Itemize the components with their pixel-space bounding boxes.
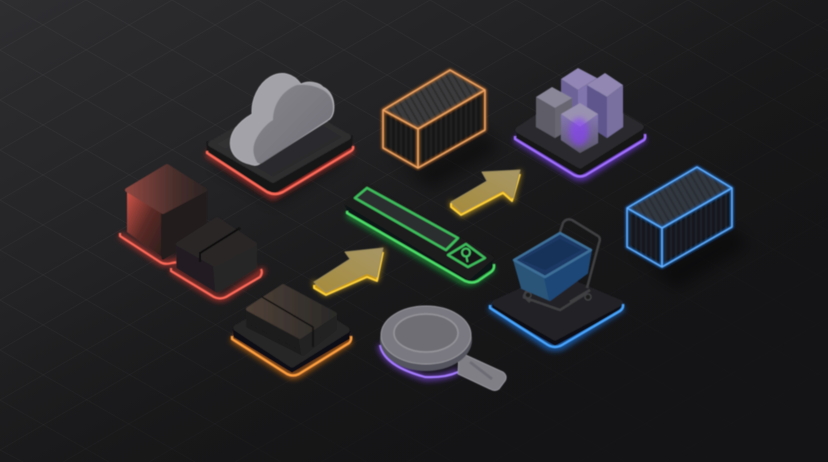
orange platform with box bbox=[232, 286, 351, 376]
front glowing block bbox=[561, 103, 598, 153]
left block bbox=[536, 87, 572, 138]
platform top bbox=[519, 91, 640, 165]
glass cloud bbox=[230, 73, 334, 165]
lens bbox=[380, 309, 472, 371]
right block bbox=[587, 73, 623, 138]
search button bbox=[448, 244, 485, 267]
cloud on red platform bbox=[207, 73, 353, 205]
bar top bbox=[347, 185, 491, 277]
basket bbox=[514, 260, 550, 300]
glass blocks on purple platform bbox=[515, 68, 645, 178]
handle bbox=[458, 352, 506, 390]
platform top bbox=[237, 296, 346, 364]
upper yellow arrow bbox=[451, 170, 520, 216]
cart frame bbox=[523, 219, 600, 310]
blue shipping container bbox=[627, 167, 750, 290]
taped box bbox=[178, 219, 255, 291]
green search bar bbox=[345, 185, 494, 284]
taped box bbox=[248, 286, 335, 354]
red cube bbox=[127, 166, 205, 258]
input field bbox=[355, 188, 458, 250]
back block bbox=[561, 68, 597, 125]
glass magnifying glass bbox=[380, 306, 506, 390]
lower yellow arrow bbox=[314, 248, 384, 295]
shopping cart on blue platform bbox=[490, 219, 623, 348]
orange shipping container bbox=[383, 70, 500, 190]
red cube and taped box bbox=[120, 166, 262, 298]
platform top bbox=[496, 276, 619, 337]
platform top bbox=[211, 101, 348, 180]
scene objects bbox=[120, 68, 750, 390]
